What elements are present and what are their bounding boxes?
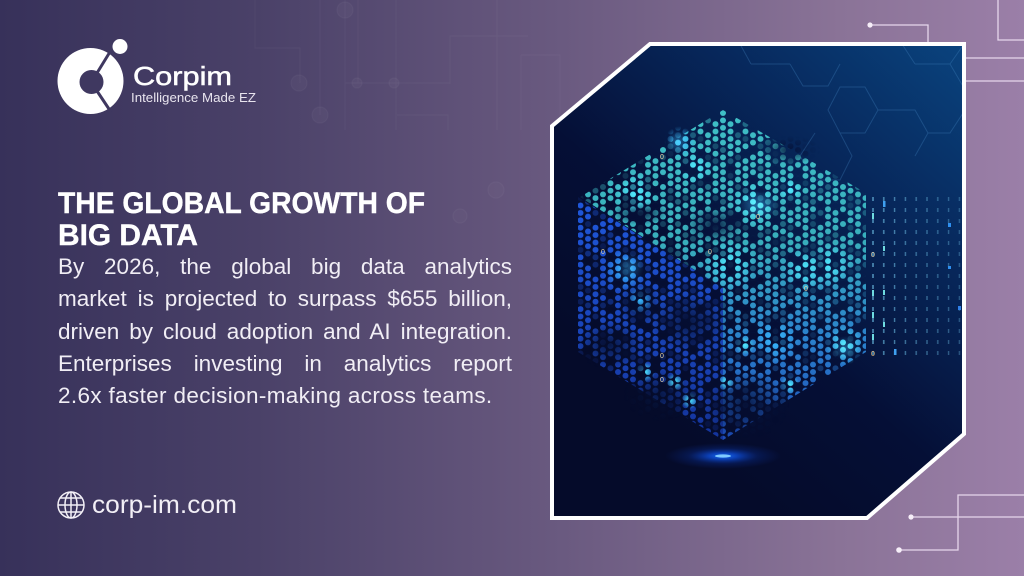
body text: 2.6x faster decision-making across teams.: [58, 383, 493, 408]
panel white border: [552, 44, 964, 518]
title: [58, 187, 425, 252]
binary digits: 0: [804, 286, 808, 293]
binary digits: 0: [660, 353, 664, 360]
glow highlights on cube: [616, 131, 857, 360]
icon: logo ring: [58, 39, 128, 114]
cube right and top faces: [580, 110, 866, 440]
cube of data dots: [576, 110, 866, 440]
dark and bright patches: [576, 126, 865, 439]
binary digits: 0: [660, 377, 664, 384]
binary digits: 0: [708, 249, 712, 256]
binary digits: 0: [871, 351, 875, 358]
binary digits: 0: [756, 214, 760, 221]
binary data strip: [870, 197, 962, 357]
faint hexagon background: [740, 44, 965, 180]
panel background: [550, 40, 966, 520]
binary digits: 0: [660, 154, 664, 161]
body text: driven by cloud adoption and AI integration.: [58, 319, 512, 344]
binary digits: 0: [871, 252, 875, 259]
body text: [58, 254, 512, 408]
body text: By 2026, the global big data analytics: [58, 254, 512, 279]
body text: Enterprises investing in analytics report: [58, 351, 512, 376]
logo: Corpim: [58, 39, 256, 114]
cube left face: [578, 197, 723, 440]
bright binary ticks: [872, 201, 961, 355]
body text: market is projected to surpass $655 billion,: [58, 286, 512, 311]
logo wordmark: Corpim: [133, 61, 232, 91]
title: THE GLOBAL GROWTH OF: [58, 187, 425, 220]
binary digits: 0: [601, 249, 605, 256]
logo tagline: Intelligence Made EZ: [131, 91, 256, 105]
website address: corp-im.com: [92, 491, 237, 519]
website link with globe icon: [57, 491, 237, 519]
icon: globe: [58, 492, 84, 518]
panel: big data cube image: [550, 42, 966, 520]
title: BIG DATA: [58, 219, 198, 252]
base light flare: [670, 444, 775, 468]
binary digits: [601, 154, 875, 384]
